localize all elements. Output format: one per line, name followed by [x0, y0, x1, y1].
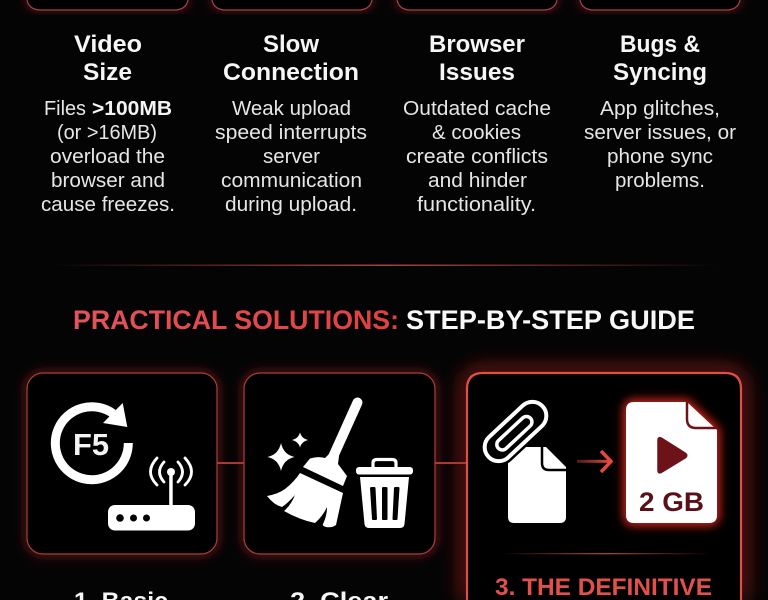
text block: video size: browser and: [51, 170, 165, 192]
text block: video size: [41, 31, 175, 216]
arrow: file to 2 GB: [577, 451, 611, 472]
text block: bugs and syncing: server issues, or: [584, 122, 736, 144]
icon: F5 refresh: [55, 403, 128, 480]
text block: browser issues: Outdated cache: [403, 98, 551, 120]
panel: step 1 basic: [27, 373, 217, 600]
text block: browser issues: and hinder: [428, 170, 527, 192]
glow: step card halos and connectors: [27, 373, 741, 600]
text block: video size: Size: [83, 59, 132, 86]
icon: paperclip: [475, 392, 556, 471]
text block: bugs and syncing: phone sync: [607, 146, 713, 168]
text block: slow connection: communication: [221, 170, 362, 192]
text block: bugs and syncing: Syncing: [613, 59, 707, 86]
text block: video size: cause freezes.: [41, 194, 175, 216]
text block: slow connection: server: [263, 146, 320, 168]
text block: browser issues: functionality.: [417, 194, 536, 216]
panel: step 3 the definitive: [467, 373, 741, 600]
text block: slow connection: during upload.: [225, 194, 357, 216]
text block: slow connection: Weak upload: [232, 98, 351, 120]
text block: browser issues: Issues: [439, 59, 515, 86]
text block: slow connection: Slow: [263, 31, 319, 58]
heading: practical solutions: STEP-BY-STEP GUIDE: [406, 305, 695, 335]
text block: video size: Files: [44, 98, 86, 120]
text block: slow connection: speed interrupts: [215, 122, 367, 144]
icon: 2 GB video file: [626, 402, 717, 523]
icon: broom and sparkles: [267, 402, 358, 527]
text block: browser issues: [403, 31, 551, 216]
heading: practical solutions: PRACTICAL SOLUTIONS:: [73, 305, 399, 335]
text block: slow connection: Connection: [223, 59, 359, 86]
panel: cause card bottoms: [27, 0, 740, 10]
text block: bugs and syncing: App glitches,: [600, 98, 720, 120]
text block: video size: >100MB: [92, 98, 172, 120]
text block: browser issues: create conflicts: [406, 146, 548, 168]
text block: video size: overload the: [50, 146, 165, 168]
text block: bugs and syncing: [584, 31, 736, 192]
text block: video size: Video: [74, 31, 142, 58]
heading: practical solutions: [73, 305, 695, 335]
text block: browser issues: Browser: [429, 31, 525, 58]
icon: small file: [508, 446, 567, 523]
text block: browser issues: & cookies: [432, 122, 521, 144]
panel: step 2 clear: [244, 373, 435, 600]
icon: router: [108, 458, 195, 530]
icon: F5 refresh: F5: [73, 427, 109, 462]
text block: bugs and syncing: problems.: [615, 170, 705, 192]
text block: bugs and syncing: Bugs &: [620, 31, 700, 58]
icon: trash can: [356, 460, 413, 528]
icon: 2 GB video file: 2 GB: [639, 487, 704, 517]
text block: slow connection: [215, 31, 367, 216]
text block: video size: (or >16MB): [57, 122, 157, 144]
